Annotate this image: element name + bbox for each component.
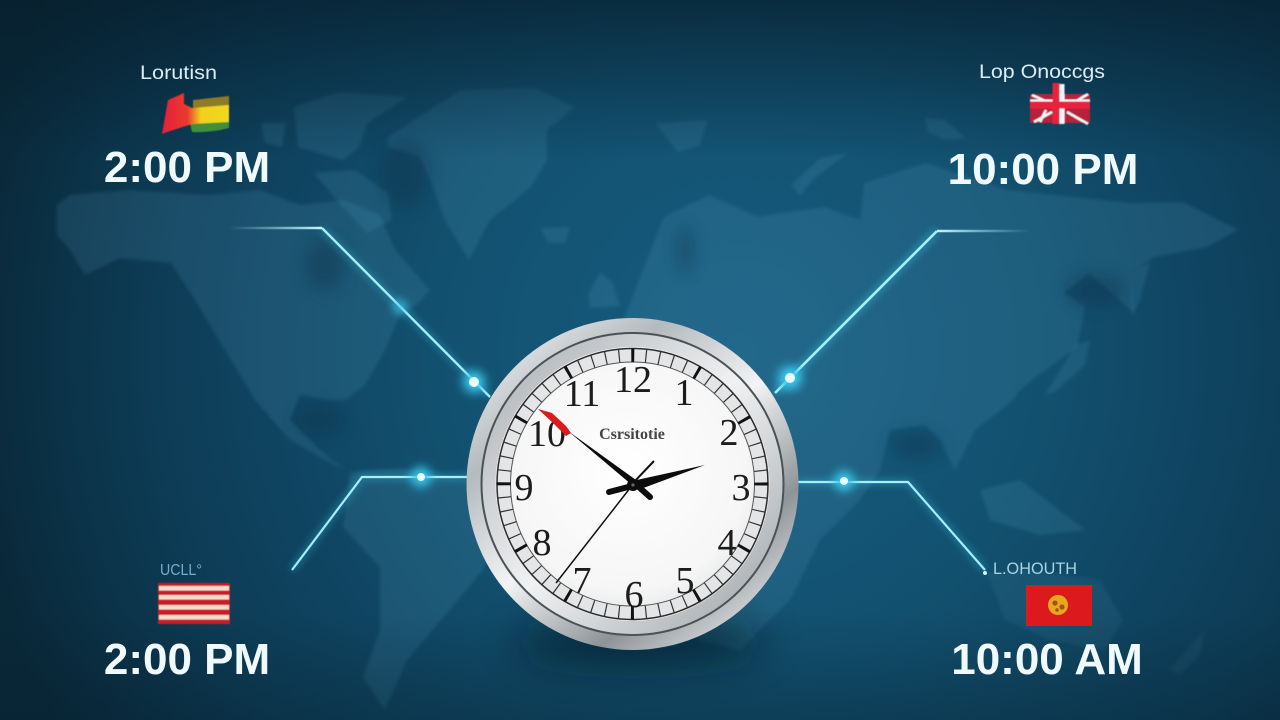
- location label: L.OHOUTH: [993, 559, 1077, 578]
- map: Arctic Russia islands: [925, 118, 965, 140]
- connector: top left: [228, 228, 490, 397]
- map: Novaya Zemlya: [791, 153, 848, 195]
- numerals: [514, 359, 750, 616]
- time: 2:00 PM: [104, 635, 270, 684]
- location label: UCLL°: [160, 562, 202, 579]
- clock hands: [538, 409, 705, 583]
- clock bezel: [466, 318, 798, 650]
- map: Greenland: [388, 88, 575, 260]
- connector: top right: [775, 231, 1030, 393]
- connector: bottom right: [798, 471, 987, 575]
- numerals: 5: [676, 560, 694, 602]
- icon: flag red yellow green: [162, 93, 229, 134]
- brand label: Csrsitotie: [599, 426, 665, 443]
- numerals: 6: [624, 574, 644, 616]
- icon: striped flag: [158, 583, 230, 624]
- location label: Lop Onoccgs: [979, 62, 1105, 83]
- map: dark seas: [296, 141, 1125, 459]
- panel: bottom right location: [951, 559, 1143, 684]
- time: 10:00 AM: [951, 635, 1143, 684]
- map: Arctic islands: [294, 92, 408, 160]
- numerals: 7: [572, 560, 592, 602]
- map: Svalbard: [656, 120, 708, 152]
- panel: top right location: [948, 62, 1138, 194]
- map: UK: [588, 272, 620, 308]
- time: 10:00 PM: [948, 145, 1138, 194]
- map: North America: [57, 190, 430, 470]
- clock: [466, 318, 798, 666]
- map: New Zealand: [1170, 630, 1205, 675]
- numerals: 10: [528, 413, 566, 455]
- numerals: 12: [614, 359, 652, 401]
- numerals: 11: [564, 373, 600, 415]
- connector: bottom left: [292, 467, 470, 570]
- map: SE Asia islands: [980, 480, 1085, 535]
- clock face: [496, 347, 770, 621]
- map: Kamchatka: [1130, 262, 1150, 315]
- time: 2:00 PM: [104, 143, 270, 192]
- numerals: 2: [720, 412, 738, 454]
- icon: UK flag: [1030, 83, 1090, 124]
- location label: Lorutisn: [140, 63, 217, 84]
- map: Iceland: [540, 227, 570, 243]
- panel: top left location: [104, 63, 270, 192]
- numerals: 1: [674, 372, 694, 414]
- map: Japan: [1045, 340, 1090, 395]
- world map: [57, 88, 1238, 710]
- map: South America: [343, 468, 500, 710]
- map: Eurasia and Africa: [610, 163, 1238, 650]
- icon: red flag with gold emblem: [1026, 585, 1092, 626]
- panel: bottom left location: [104, 562, 270, 684]
- numerals: 8: [532, 522, 552, 564]
- minute track: [497, 348, 768, 620]
- map: Australia: [987, 570, 1123, 650]
- clock shadow: [515, 618, 765, 666]
- numerals: 4: [718, 522, 736, 564]
- numerals: 3: [732, 467, 750, 509]
- numerals: 9: [514, 467, 534, 509]
